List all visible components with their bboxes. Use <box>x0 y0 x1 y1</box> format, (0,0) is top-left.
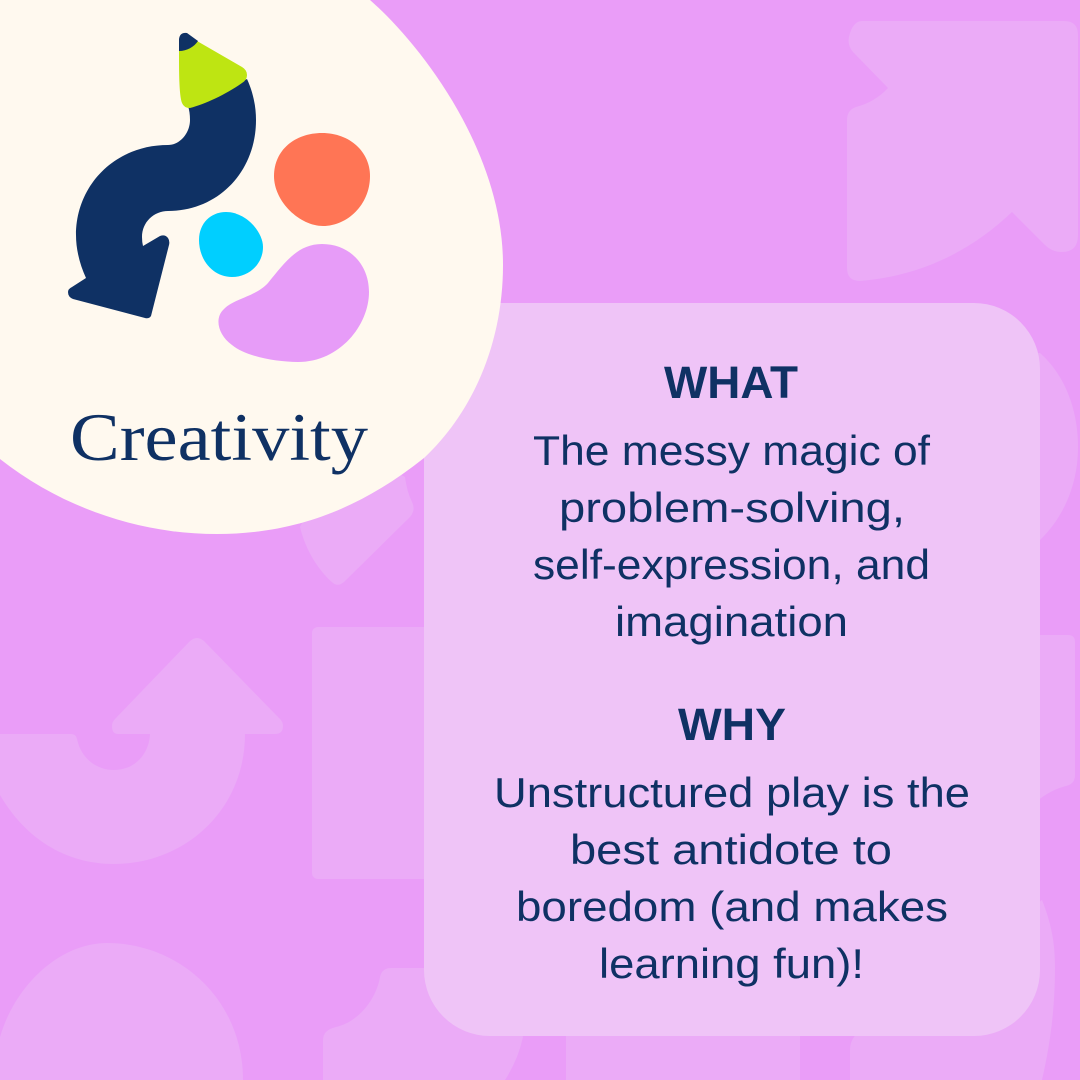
icon: pencil arrow body <box>68 79 256 318</box>
body: what description: imagination <box>615 598 848 645</box>
icon: cyan blob <box>199 212 263 277</box>
icon: pencil tip <box>179 41 247 108</box>
panel: cream logo blob <box>0 0 503 534</box>
body: what description: self-expression, and <box>533 541 930 588</box>
icon: creativity logo <box>68 33 370 362</box>
body: what description: problem-solving, <box>559 484 905 531</box>
icon: orange blob <box>274 133 370 226</box>
text block: why <box>494 699 970 987</box>
body: why description: Unstructured play is the <box>494 769 970 816</box>
body: why description <box>494 769 970 987</box>
heading: what: WHAT <box>664 357 798 408</box>
body: why description: boredom (and makes <box>516 883 948 930</box>
title: Creativity: Creativity <box>70 399 368 475</box>
icon: pencil lead <box>179 33 198 51</box>
body: why description: best antidote to <box>570 826 892 873</box>
body: what description: The messy magic of <box>533 427 930 474</box>
text block: what <box>533 357 930 645</box>
body: why description: learning fun)! <box>599 940 864 987</box>
body: what description <box>533 427 930 645</box>
panel: what and why <box>424 303 1040 1036</box>
icon: purple blob <box>218 244 369 362</box>
heading: why: WHY <box>678 699 786 750</box>
